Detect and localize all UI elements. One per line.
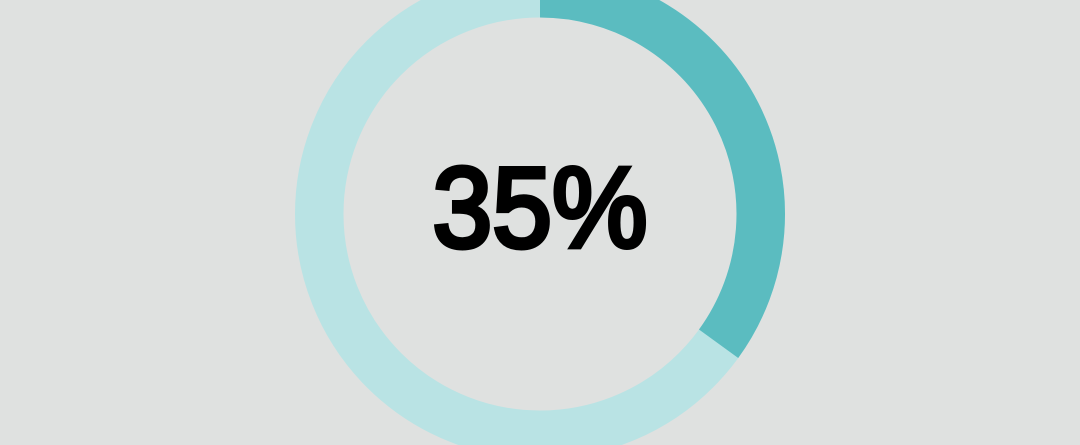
donut track: remaining 65 percent: [319, 0, 761, 435]
center label: 35%: 35%: [432, 145, 648, 272]
donut arc: 35 percent value: [540, 0, 761, 344]
